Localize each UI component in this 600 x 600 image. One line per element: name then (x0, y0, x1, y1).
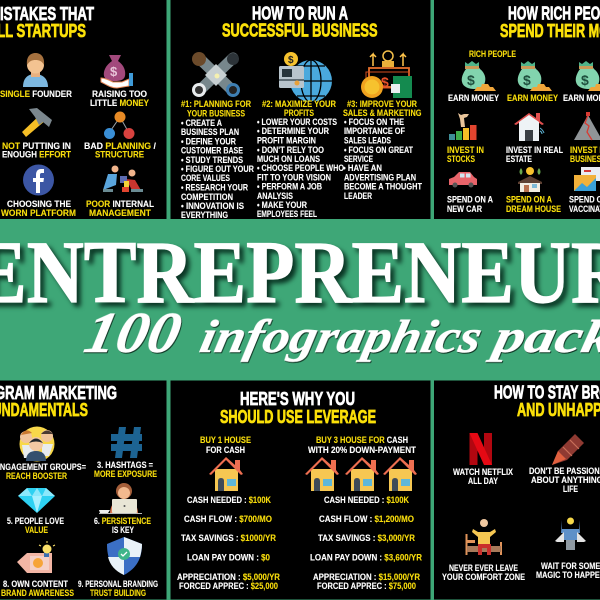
text column 1: planning: BUSINESS PLAN (181, 127, 239, 137)
icon: money bag 3 (576, 61, 600, 91)
label: persistence is key: IS KEY (112, 525, 134, 535)
icon: sales and marketing: $ (381, 74, 389, 90)
label: persistence is key (94, 516, 151, 535)
icon: money bag 2 (518, 61, 552, 91)
label: personal branding trust building (78, 579, 158, 598)
icon: facebook (23, 164, 54, 196)
text column 1: planning: COMPETITION (181, 192, 233, 202)
heading: buy 1 house (200, 435, 251, 455)
text column 1: planning: #1: PLANNING FOR (181, 99, 252, 109)
text column 1: planning: • INNOVATION IS (181, 201, 244, 211)
labels: spend row: DREAM HOUSE (506, 204, 561, 214)
text column 3: sales and marketing: • FOCUS ON THE (344, 117, 404, 127)
label: raising too little money: RAISING TOO (92, 89, 147, 99)
icon: card and globe (279, 52, 332, 102)
text column 1: planning: • STUDY TRENDS (181, 155, 243, 165)
label: own content brand awareness: BRAND AWARENESS (1, 588, 74, 598)
text column 2: maximize profits: MUCH ON LOANS (257, 154, 320, 164)
label: personal branding trust building: TRUST BUILDING (90, 588, 146, 598)
text column 1: planning: YOUR BUSINESS (187, 108, 245, 118)
icon: netflix (470, 433, 492, 465)
heading: mistakes that kill startups (0, 4, 94, 41)
icon: money bag 1 (462, 61, 496, 91)
text column 3: sales and marketing: • HAVE AN (343, 163, 382, 173)
icon: brand tag with bulb (17, 541, 55, 573)
label: bad planning / structure (84, 141, 157, 160)
label: people love value: 5. PEOPLE LOVE (7, 516, 64, 526)
heading: here's why you should use leverage: SHOULD USE LEVERAGE (220, 407, 376, 427)
figures: one house for cash: APPRECIATION : $5,000/YR (177, 572, 281, 582)
figures: three houses with leverage: CASH NEEDED : $100K (324, 495, 410, 505)
text column 1: planning: • CREATE A (181, 118, 223, 128)
text column 3: sales and marketing: • FOCUS ON GREAT (344, 145, 413, 155)
text column 2: maximize profits: #2: MAXIMIZE YOUR (262, 99, 337, 109)
icon: house single (209, 457, 243, 491)
label: never ever leave your comfort zone: NEVER EVER LEAVE (449, 563, 518, 573)
icon: engagement group (20, 426, 54, 462)
icon: vaccination chart (574, 167, 600, 191)
label: hashtags more exposure: 3. HASHTAGS = (97, 460, 153, 470)
labels: spend row: SPEND ON A (506, 194, 553, 204)
label: raising too little money: LITTLE MONEY (90, 98, 149, 108)
heading: how to run a successful business: SUCCESSFUL BUSINESS (222, 21, 378, 41)
figures: one house for cash: CASH NEEDED : $100K (187, 495, 272, 505)
heading: buy 3 house (308, 435, 417, 455)
label: people love value: VALUE (25, 525, 48, 535)
label: choosing the worn platform: WORN PLATFORM (1, 208, 76, 218)
heading: how rich people spend their money (500, 4, 600, 41)
label: own content brand awareness (1, 579, 74, 598)
icon: shield (107, 537, 142, 575)
icon: man stretching by bed (466, 519, 502, 555)
text column 3: sales and marketing: SERVICE (344, 154, 373, 164)
text column 2: maximize profits: ANALYSIS (257, 191, 293, 201)
heading: how to run a successful business: HOW TO RUN A (252, 4, 348, 24)
icon: car (449, 172, 477, 188)
figures: three houses with leverage: TAX SAVINGS : $3,000/YR (318, 533, 416, 543)
icon: woman at laptop (99, 483, 142, 514)
label: don't be passionate (529, 466, 600, 494)
labels: invest row (447, 145, 600, 164)
label: watch netflix all day: WATCH NETFLIX (453, 467, 513, 477)
icon: house two of three (345, 457, 379, 491)
icon: money bag 3: $ (581, 72, 589, 88)
heading: buy 1 house: FOR CASH (206, 445, 245, 455)
label: wait for something magic to happen (536, 561, 600, 580)
label: hashtags more exposure: MORE EXPOSURE (94, 469, 157, 479)
figures: one house for cash: LOAN PAY DOWN : $0 (187, 552, 270, 562)
label: never ever leave your comfort zone (442, 563, 525, 582)
text column 2: maximize profits: • DETERMINE YOUR (257, 126, 330, 136)
banner subtitle (79, 301, 600, 365)
banner subtitle: 100 (79, 301, 187, 365)
label: poor internal management: MANAGEMENT (89, 208, 152, 218)
label: rich people: RICH PEOPLE (469, 49, 516, 59)
text column 2: maximize profits: • CHOOSE PEOPLE WHO (257, 163, 344, 173)
heading: buy 3 house: BUY 3 HOUSE FOR CASH (316, 435, 408, 445)
text column 2: maximize profits: PROFIT MARGIN (257, 136, 316, 146)
heading: buy 1 house: BUY 1 HOUSE (200, 435, 251, 445)
label: persistence is key: 6. PERSISTENCE (94, 516, 151, 526)
icon: crayon (552, 434, 584, 465)
figures: three houses with leverage: FORCED APPREC : $75,000 (317, 581, 416, 591)
icon: stocks bars (449, 113, 476, 140)
labels: earn money row: EARN MONEY (448, 93, 499, 103)
label: bad planning / structure: BAD PLANNING / (84, 141, 157, 151)
labels: spend row: NEW CAR (447, 204, 483, 214)
text column 3: sales and marketing: BECOME A THOUGHT (344, 182, 423, 192)
icon: meeting table (192, 52, 240, 97)
text column 1: planning (181, 99, 255, 220)
icon: mountain flag (574, 112, 600, 140)
panel: run a successful business (170, 0, 430, 220)
figures: one house for cash: CASH FLOW : $700/MO (184, 514, 272, 524)
icon: dream house (518, 167, 542, 192)
label: poor internal management (86, 199, 155, 218)
figures: one house for cash (177, 495, 281, 591)
text column 3: sales and marketing: IMPORTANCE OF (344, 126, 406, 136)
text column 2: maximize profits (257, 99, 344, 219)
text column 3: sales and marketing: SALES LEADS (344, 136, 391, 146)
panel: leverage (170, 380, 430, 600)
labels: invest row: STOCKS (447, 154, 475, 164)
icon: winged man with bulb (555, 518, 586, 550)
text column 2: maximize profits: • LOWER YOUR COSTS (257, 117, 337, 127)
text column 2: maximize profits: • MAKE YOUR (257, 200, 308, 210)
figures: three houses with leverage (310, 495, 423, 591)
figures: three houses with leverage: LOAN PAY DOWN : $3,600/YR (310, 552, 423, 562)
icon: structure nodes (104, 112, 134, 139)
label: watch netflix all day (453, 467, 513, 486)
text column 2: maximize profits: • PERFORM A JOB (257, 182, 322, 192)
figures: three houses with leverage: APPRECIATION : $15,000/YR (313, 572, 421, 582)
label: choosing the worn platform: CHOOSING THE (7, 199, 71, 209)
icon: house with wifi (514, 113, 544, 141)
heading: instagram marketing fundamentals (0, 383, 117, 420)
label: people love value (7, 516, 64, 535)
icon: money bag in hand: $ (110, 64, 118, 79)
text column 1: planning: CORE VALUES (181, 173, 230, 183)
text column 3: sales and marketing (343, 99, 423, 201)
labels: earn money row (448, 93, 600, 103)
text column 2: maximize profits: FIT TO YOUR VISION (257, 172, 331, 182)
icon: card and globe: $ (288, 55, 294, 66)
icon: diamond (18, 488, 55, 513)
heading: buy 3 house: WITH 20% DOWN-PAYMENT (308, 445, 417, 455)
label: choosing the worn platform (1, 199, 76, 218)
label: not putting in enough effort: NOT PUTTING IN (2, 141, 71, 151)
label: watch netflix all day: ALL DAY (468, 476, 498, 486)
text column 2: maximize profits: EMPLOYEES FEEL (257, 209, 317, 219)
label: don't be passionate: LIFE (563, 484, 578, 494)
icon: two kids playing (103, 166, 143, 192)
label: poor internal management: POOR INTERNAL (86, 199, 155, 209)
text column 3: sales and marketing: LEADER (344, 191, 372, 201)
text column 2: maximize profits: PROFITS (284, 108, 314, 118)
label: never ever leave your comfort zone: YOUR COMFORT ZONE (442, 572, 525, 582)
icon: money bag 1: $ (467, 72, 475, 88)
labels: invest row: ESTATE (506, 154, 532, 164)
text column 3: sales and marketing: SALES & MARKETING (343, 108, 422, 118)
label: hashtags more exposure (94, 460, 157, 479)
label: personal branding trust building: 9. PERSONAL BRANDING (78, 579, 158, 589)
text column 1: planning: EVERYTHING (181, 210, 228, 220)
text column 1: planning: CUSTOMER BASE (181, 146, 243, 156)
text column 3: sales and marketing: #3: IMPROVE YOUR (347, 99, 418, 109)
text column 1: planning: • FIGURE OUT YOUR (181, 164, 255, 174)
heading: how to run a successful business (222, 4, 378, 41)
heading: here's why you should use leverage: HERE'S WHY YOU (240, 389, 355, 409)
figures: one house for cash: FORCED APPREC : $25,000 (179, 581, 278, 591)
icon: hashtag (111, 427, 142, 458)
text column 1: planning: • DEFINE YOUR (181, 136, 237, 146)
panel: instagram marketing fundamentals (0, 380, 166, 600)
label: not putting in enough effort: ENOUGH EFFORT (2, 150, 72, 160)
label: raising too little money (90, 89, 149, 108)
label: engagement groups reach booster: REACH BOOSTER (6, 471, 68, 481)
icon: house three of three (383, 457, 417, 491)
labels: spend row (447, 194, 600, 214)
panel: stay broke and unhappy (434, 380, 600, 600)
heading: how to stay broke and unhappy (494, 382, 600, 420)
figures: three houses with leverage: CASH FLOW : $1,200/MO (319, 514, 414, 524)
text column 2: maximize profits: • DON'T RELY TOO (257, 145, 324, 155)
icon: single founder (23, 53, 48, 87)
text column 1: planning: • RESEARCH YOUR (181, 182, 249, 192)
icon: house one of three (305, 457, 339, 491)
text column 3: sales and marketing: ADVERTISING PLAN (344, 172, 416, 182)
labels: spend row: SPEND ON A (447, 194, 494, 204)
icon: hammer (22, 108, 52, 137)
icon: sales and marketing (361, 51, 412, 98)
heading: here's why you should use leverage (220, 389, 376, 427)
panel: how rich people spend money (434, 0, 600, 219)
labels: earn money row: EARN MONEY (507, 93, 558, 103)
figures: one house for cash: TAX SAVINGS : $1000/YR (181, 533, 277, 543)
labels: invest row: INVEST IN REAL (506, 145, 564, 155)
panel: startup mistakes (0, 0, 166, 219)
icon: money bag in hand (101, 55, 133, 88)
label: single founder: SINGLE FOUNDER (0, 89, 73, 99)
labels: invest row: INVEST IN (447, 145, 484, 155)
label: own content brand awareness: 8. OWN CONTENT (3, 579, 69, 589)
banner subtitle: pack (485, 311, 600, 363)
banner subtitle: infographics (196, 311, 487, 363)
label: engagement groups reach booster (0, 462, 86, 481)
label: not putting in enough effort (2, 141, 72, 160)
label: bad planning / structure: STRUCTURE (95, 150, 144, 160)
icon: money bag 2: $ (523, 72, 531, 88)
